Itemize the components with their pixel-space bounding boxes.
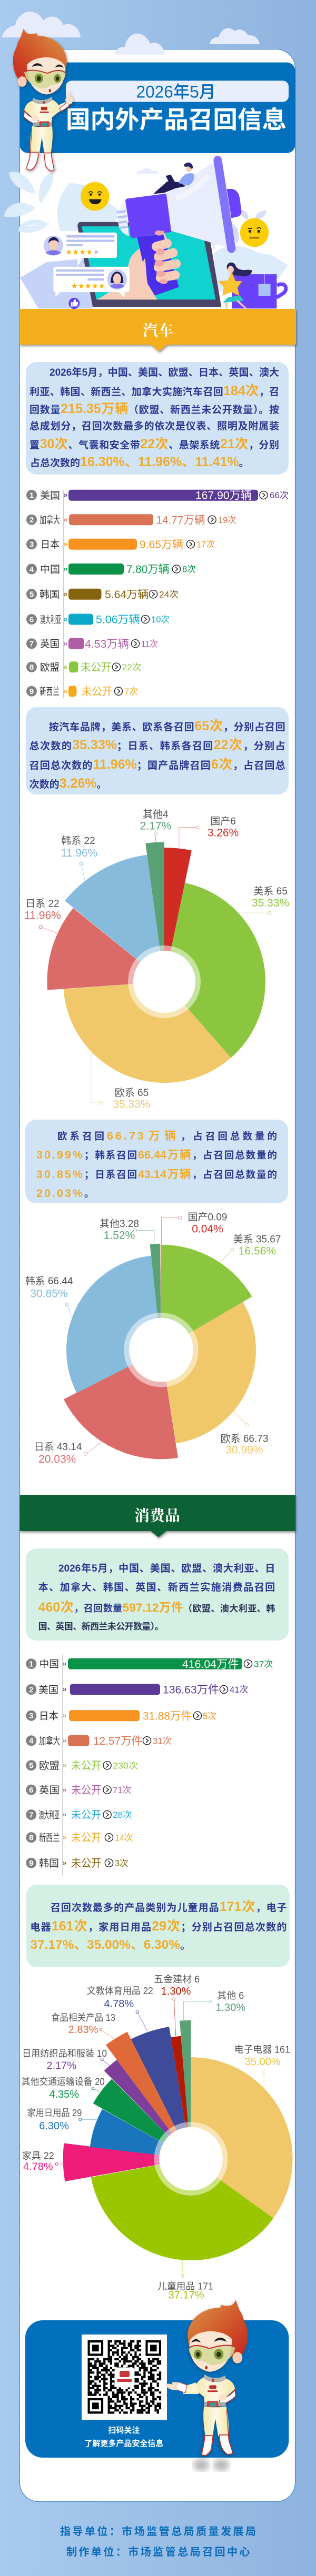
- row 欧盟: 22次: [122, 662, 141, 672]
- label 其他: 其他4: [143, 809, 169, 820]
- label 欧系: 35.33%: [113, 1099, 151, 1111]
- row 日本: »: [63, 540, 67, 548]
- panel: 消费品 summary text: 国、英国、新西兰未公开数量）。: [38, 1622, 163, 1632]
- section band: 汽车: 汽车: [143, 322, 173, 339]
- credits: 指导单位：市场监管总局质量发展局: [60, 2525, 256, 2538]
- row 中国: 37次: [254, 1659, 273, 1669]
- row 欧盟: »: [63, 662, 67, 671]
- label 食品相关产品: 食品相关产品 13: [51, 2012, 115, 2023]
- label 日系: [34, 1441, 82, 1465]
- pie chart: 汽车品牌召回次数: [24, 809, 304, 1122]
- label 文教体育用品: [87, 1986, 153, 2010]
- panel: 汽车 summary text: 占总次数的16.30%、11.96%、11.41%。: [30, 455, 249, 469]
- row 韩国: »: [63, 589, 67, 598]
- row 英国: 11次: [141, 639, 158, 649]
- row 中国: 1: [29, 1660, 33, 1669]
- row 新西兰: [26, 686, 138, 698]
- label 美系: [252, 886, 289, 909]
- row 新西兰: 未公开: [71, 1832, 101, 1844]
- row 中国: 中国: [39, 1658, 59, 1670]
- row 美国: 167.90万辆: [195, 490, 252, 502]
- megaphone: [118, 160, 242, 249]
- row 日本: 17次: [196, 539, 215, 549]
- label 美系: 美系 65: [253, 886, 288, 897]
- label 其他: 2.17%: [140, 820, 171, 832]
- row 欧盟: 8: [29, 663, 34, 672]
- pie chart: 消费品类别: [22, 1974, 316, 2301]
- row 澳大利亚: [26, 613, 170, 626]
- panel: 汽车 summary text: 回数量215.35万辆（欧盟、新西兰未公开数量）。按: [29, 401, 279, 416]
- label 电子电器: [234, 2044, 290, 2068]
- hand holding megaphone: [97, 230, 179, 299]
- row 英国: 英国: [39, 1785, 60, 1796]
- section band: 汽车: [20, 309, 296, 351]
- row 英国: 4.53万辆: [85, 638, 129, 650]
- row 韩国: 9: [29, 1859, 33, 1868]
- label 其他: 1.52%: [104, 1230, 135, 1242]
- label 日用纺织品和服装: [22, 2048, 107, 2072]
- label 家用日用品: 家用日用品 29: [27, 2108, 82, 2118]
- row 加拿大: »: [63, 515, 67, 524]
- panel: 汽车 summary text: 置30次、气囊和安全带22次、悬架系统21次，分别: [29, 437, 279, 451]
- panel: QR code footer: [25, 2320, 289, 2458]
- hero illustration: megaphone and reviews: [4, 160, 288, 309]
- panel: 汽车 summary text: 2026年5月，中国、美国、欧盟、日本、英国、澳大: [50, 367, 279, 378]
- row 欧盟: 欧盟: [39, 1760, 60, 1772]
- row 美国: 136.63万件: [163, 1684, 219, 1696]
- label 其他交通运输设备: 4.35%: [49, 2089, 79, 2100]
- row 中国: 416.04万件: [182, 1658, 239, 1671]
- woman with star: [219, 263, 252, 308]
- icon: thumbs up: [69, 298, 80, 309]
- row 欧盟: 5: [29, 1762, 33, 1770]
- decorative clouds: [2, 12, 260, 55]
- row 英国: [26, 638, 158, 650]
- label 欧系: [113, 1087, 151, 1111]
- label 其他: [215, 1990, 245, 2014]
- row 新西兰: 新西兰: [39, 686, 60, 698]
- label 韩系: 韩系 66.44: [25, 1275, 73, 1287]
- tablet: [77, 222, 221, 307]
- row 欧盟: 欧盟: [40, 662, 60, 673]
- row 中国: »: [63, 565, 67, 573]
- row 美国: »: [63, 490, 67, 499]
- review card 2: [53, 258, 130, 298]
- label 其他交通运输设备: 其他交通运输设备 20: [22, 2076, 105, 2087]
- panel: 消费品类别 text: 37.17%、35.00%、6.30%。: [30, 1938, 190, 1952]
- label 家用日用品: [27, 2108, 82, 2132]
- panel: 汽车 summary text: [26, 362, 289, 475]
- panel: 汽车品牌 text: 按汽车品牌，美系、欧系各召回65次，分别占召回: [49, 719, 285, 733]
- label 国产: [188, 1211, 227, 1235]
- panel: 汽车品牌数量 text: [25, 1120, 288, 1203]
- label 国产: 国产6: [210, 816, 236, 827]
- row 新西兰: 7次: [124, 687, 138, 697]
- label 日系: 11.96%: [24, 910, 61, 922]
- label 美系: [233, 1234, 281, 1257]
- row 中国: [26, 564, 196, 576]
- main title: 国内外产品召回信息: [66, 106, 287, 134]
- row 英国: 71次: [113, 1785, 132, 1795]
- row 韩国: 韩国: [39, 1858, 59, 1869]
- row 中国: 8次: [182, 565, 196, 575]
- row 欧盟: 未公开: [81, 661, 112, 673]
- row 韩国: 24次: [159, 589, 179, 599]
- date pill: [66, 80, 289, 102]
- row 英国: [26, 1784, 131, 1796]
- row 欧盟: [26, 661, 141, 673]
- label 国产: [208, 816, 239, 839]
- label 其他: 1.30%: [215, 2002, 245, 2014]
- label 儿童用品: 儿童用品 171: [157, 2281, 213, 2291]
- row 澳大利亚: 未公开: [71, 1809, 101, 1822]
- label 儿童用品: 37.17%: [169, 2290, 204, 2301]
- panel: 汽车品牌数量 text: 欧系召回66.73万辆，占召回总数量的: [57, 1130, 277, 1142]
- label 欧系: [221, 1433, 268, 1456]
- row 澳大利亚: 7: [29, 1810, 33, 1819]
- label 其他: 其他3.28: [100, 1218, 139, 1230]
- row 加拿大: 2: [29, 516, 34, 525]
- row 美国: [26, 490, 289, 502]
- panel: 汽车 summary text: 利亚、韩国、新西兰、加拿大实施汽车召回184次，召: [29, 384, 279, 398]
- row 美国: 美国: [40, 490, 60, 501]
- row 日本: 日本: [39, 1710, 58, 1722]
- label 韩系: 30.85%: [30, 1288, 68, 1300]
- section band: 消费品: 消费品: [134, 1507, 180, 1524]
- row 澳大利亚: 28次: [113, 1810, 132, 1820]
- row 韩国: [26, 1857, 128, 1869]
- row 美国: 2: [29, 1685, 33, 1694]
- QR caption: [84, 2426, 163, 2448]
- label 文教体育用品: 4.78%: [104, 1998, 134, 2010]
- row 英国: 7: [29, 640, 34, 649]
- label 家具: 4.78%: [23, 2161, 53, 2173]
- QR code: [82, 2334, 167, 2420]
- label 五金建材: 五金建材 6: [154, 1974, 200, 1985]
- row 澳大利亚: 澳大利亚: [40, 614, 61, 626]
- panel: 汽车品牌数量 text: 30.85%；日系召回43.14万辆，占召回总数量的: [36, 1168, 277, 1181]
- panel: 消费品 summary text: 本、加拿大、韩国、英国、新西兰实施消费品召回: [38, 1582, 275, 1593]
- row 新西兰: 新西兰: [39, 1832, 60, 1844]
- row 澳大利亚: 10次: [151, 615, 170, 625]
- row 加拿大: 14.77万辆: [156, 514, 205, 526]
- row 日本: 3: [29, 540, 34, 549]
- icon: neutral emoji: [240, 218, 269, 247]
- section band: 消费品: [20, 1495, 295, 1537]
- label 韩系: 韩系 22: [61, 835, 95, 847]
- row 美国: 66次: [270, 490, 289, 500]
- panel: 汽车品牌数量 text: 20.03%。: [36, 1187, 94, 1200]
- credits: 制作单位：市场监管总局召回中心: [66, 2545, 250, 2558]
- row 韩国: [26, 589, 179, 601]
- row 中国: 4: [29, 565, 34, 574]
- row 日本: [26, 539, 215, 551]
- label 日系: 日系 22: [25, 898, 60, 910]
- row 新西兰: [26, 1832, 133, 1844]
- row 英国: 未公开: [71, 1784, 101, 1796]
- panel: 汽车品牌 text: [26, 707, 289, 794]
- mascot presenting QR code: [165, 2300, 248, 2456]
- row 美国: 美国: [38, 1684, 58, 1696]
- label 其他: [100, 1218, 139, 1242]
- row 英国: »: [63, 639, 67, 647]
- leaves: [4, 172, 288, 308]
- row 澳大利亚: »: [63, 1810, 67, 1818]
- row 美国: [26, 1684, 249, 1696]
- panel: 汽车 summary text: 总成划分，召回次数最多的依次是仪表、照明及附属装: [29, 421, 279, 432]
- label 其他: 其他 6: [217, 1990, 244, 2001]
- label 欧系: 欧系 65: [115, 1087, 149, 1099]
- title banner: [20, 63, 295, 153]
- label 家用日用品: 6.30%: [39, 2120, 69, 2132]
- label 食品相关产品: [51, 2012, 115, 2036]
- panel: 消费品 summary text: 2026年5月，中国、美国、欧盟、澳大利亚、日: [58, 1563, 275, 1574]
- panel: 消费品 summary text: 460次，召回数量597.12万件（欧盟、澳大利亚、韩: [38, 1600, 275, 1615]
- row 美国: 1: [29, 491, 34, 500]
- row 日本: 9.65万辆: [140, 539, 183, 551]
- soft shadow under mascot feet: [193, 2459, 209, 2471]
- row 韩国: 韩国: [39, 589, 60, 600]
- row 中国: »: [63, 1659, 67, 1668]
- label 韩系: [61, 835, 97, 859]
- row 新西兰: 8: [29, 1834, 33, 1843]
- icon: happy emoji: [81, 182, 109, 211]
- panel: 汽车品牌数量 text: 30.99%；韩系召回66.44万辆，占召回总数量的: [36, 1149, 277, 1161]
- bar chart: 消费品召回: [26, 1654, 273, 1876]
- row 韩国: 3次: [115, 1858, 129, 1868]
- label 欧系: 30.99%: [225, 1444, 263, 1456]
- row 中国: 中国: [40, 564, 60, 575]
- label 美系: 美系 35.67: [233, 1234, 281, 1245]
- row 中国: 7.80万辆: [126, 564, 170, 576]
- row 英国: 6: [29, 1786, 33, 1795]
- QR caption: 扫码关注: [108, 2426, 140, 2435]
- row 欧盟: 未公开: [71, 1760, 101, 1772]
- label 家具: 家具 22: [22, 2150, 54, 2161]
- label 日系: 20.03%: [38, 1453, 76, 1465]
- label 美系: 35.33%: [252, 897, 289, 909]
- row 欧盟: »: [63, 1760, 67, 1769]
- row 加拿大: [26, 514, 236, 526]
- row 日本: 31.88万件: [143, 1710, 192, 1722]
- row 韩国: »: [63, 1858, 67, 1867]
- panel: 消费品 summary text: [26, 1548, 289, 1641]
- label 韩系: [25, 1275, 73, 1300]
- panel: 消费品类别 text: 召回次数最多的产品类别为儿童用品171次，电子: [51, 1899, 287, 1914]
- review card 1: [41, 233, 117, 258]
- row 英国: 英国: [40, 638, 60, 650]
- row 日本: 3: [29, 1712, 33, 1720]
- row 英国: »: [63, 1785, 67, 1794]
- row 澳大利亚: 6: [29, 615, 34, 624]
- tea cup: [232, 274, 286, 308]
- panel: 消费品类别 text: [26, 1885, 290, 1967]
- label 其他: [140, 809, 171, 832]
- row 新西兰: 未公开: [82, 686, 112, 698]
- row 加拿大: 加拿大: [39, 514, 60, 526]
- label 食品相关产品: 2.83%: [68, 2024, 98, 2036]
- row 澳大利亚: »: [63, 615, 67, 623]
- QR caption: 了解更多产品安全信息: [84, 2439, 163, 2448]
- row 新西兰: »: [63, 687, 67, 695]
- row 加拿大: 19次: [218, 515, 236, 525]
- row 新西兰: »: [63, 1833, 67, 1842]
- row 中国: [26, 1658, 273, 1671]
- row 美国: 41次: [230, 1685, 249, 1695]
- label 国产: 3.26%: [208, 827, 239, 839]
- row 澳大利亚: 5.06万辆: [96, 614, 140, 626]
- label 电子电器: 35.00%: [245, 2056, 281, 2068]
- label 五金建材: [154, 1974, 200, 1997]
- person with laptop: [153, 163, 194, 194]
- row 澳大利亚: 澳大利亚: [39, 1809, 60, 1821]
- label 其他交通运输设备: [22, 2076, 105, 2100]
- mascot pointing: [13, 28, 73, 171]
- label 家具: [22, 2150, 54, 2173]
- row 加拿大: 加拿大: [39, 1735, 60, 1747]
- row 韩国: 5: [29, 590, 34, 599]
- label 韩系: 11.96%: [61, 847, 97, 859]
- row 加拿大: 31次: [153, 1736, 172, 1746]
- pie chart: 汽车品牌召回数量: [25, 1211, 281, 1465]
- credits: [60, 2525, 256, 2558]
- row 日本: »: [63, 1711, 67, 1719]
- label 国产: 0.04%: [192, 1223, 223, 1235]
- label 日系: [24, 898, 61, 922]
- label 文教体育用品: 文教体育用品 22: [87, 1986, 153, 1996]
- label 五金建材: 1.30%: [161, 1986, 191, 1997]
- label 国产: 国产0.09: [188, 1211, 227, 1223]
- row 日本: 日本: [41, 539, 60, 550]
- panel: 汽车品牌 text: 召回总次数的11.96%；国产品牌召回6次，占召回总: [29, 757, 285, 772]
- row 澳大利亚: [26, 1809, 132, 1822]
- row 韩国: 未公开: [71, 1857, 101, 1869]
- label 欧系: 欧系 66.73: [221, 1433, 268, 1444]
- row 欧盟: 230次: [113, 1760, 138, 1770]
- row 美国: »: [63, 1685, 67, 1693]
- bar chart: 汽车召回: [26, 490, 289, 698]
- label 日用纺织品和服装: 2.17%: [46, 2060, 76, 2072]
- row 日本: [26, 1710, 216, 1722]
- panel: 汽车品牌 text: 总次数的35.33%；日系、韩系各召回22次，分别占: [29, 738, 285, 752]
- label 日系: 日系 43.14: [34, 1441, 82, 1453]
- row 加拿大: 12.57万件: [93, 1735, 142, 1747]
- row 新西兰: 9: [29, 687, 34, 696]
- row 加拿大: [26, 1735, 172, 1747]
- row 加拿大: 4: [29, 1737, 34, 1746]
- row 欧盟: [26, 1760, 138, 1772]
- date pill: 2026年5月: [136, 83, 216, 102]
- row 日本: 5次: [203, 1711, 216, 1721]
- label 电子电器: 电子电器 161: [234, 2044, 290, 2055]
- panel: 汽车品牌 text: 次数的3.26%。: [29, 776, 107, 791]
- row 韩国: 5.64万辆: [105, 589, 149, 601]
- label 日用纺织品和服装: 日用纺织品和服装 10: [22, 2048, 107, 2059]
- row 加拿大: »: [63, 1736, 67, 1745]
- label 美系: 16.56%: [239, 1245, 276, 1257]
- row 新西兰: 14次: [115, 1833, 133, 1843]
- label 儿童用品: [157, 2281, 213, 2301]
- panel: 消费品类别 text: 电器161次，家用日用品29次；分别占召回总次数的: [30, 1919, 287, 1934]
